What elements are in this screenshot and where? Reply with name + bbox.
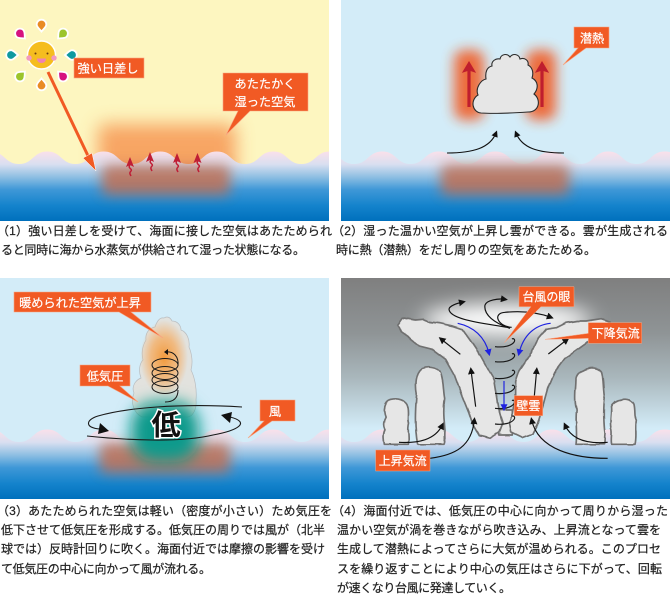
panel 3: low pressure: [0, 278, 358, 499]
label: downdraft: [545, 323, 642, 343]
caption 1: （1）強い日差しを受けて、海面に接した空気はあたためられ: [0, 223, 332, 238]
caption 3: 低下させて低気圧を形成する。低気圧の周りでは風が（北半: [1, 522, 325, 537]
label: downdraft: 下降気流: [592, 325, 640, 340]
callout: warm moist air: あたたかく: [235, 77, 295, 91]
warm sea patch: [100, 443, 230, 473]
callout: wind: [248, 400, 295, 438]
caption 1: [0, 223, 332, 257]
spiral: [152, 352, 178, 402]
low character: 低: [151, 409, 181, 442]
callout: warmed air rises: [14, 292, 163, 338]
caption 2: 時に熱（潜熱）をだし周りの空気をあたためる。: [336, 242, 596, 257]
green low-pressure area: [131, 402, 199, 462]
wind circulation: [87, 406, 242, 440]
caption 4: 生成して潜熱によってさらに大気が温められる。このプロセ: [337, 541, 661, 556]
callout: warmed air rises: 暖められた空気が上昇: [19, 295, 141, 310]
label: strong sunlight: 強い日差し: [78, 62, 138, 76]
blue downdraft arrows: [458, 323, 551, 408]
callout: latent heat: [563, 27, 609, 65]
label: strong sunlight: [74, 58, 144, 78]
wind arrowheads: [98, 412, 232, 434]
label: updraft: 上昇気流: [379, 453, 427, 468]
left wing: [398, 318, 503, 438]
arrows: water vapour: [126, 152, 202, 176]
callout: warm moist air: [223, 73, 308, 135]
caption 3: [0, 503, 332, 576]
right wing: [509, 319, 611, 438]
callout: wind: 風: [269, 404, 281, 418]
caption 4: （4）海面付近では、低気圧の中心に向かって周りから湿った: [332, 503, 668, 518]
panel 4: typhoon: [326, 278, 670, 499]
warm sea patch: [102, 165, 230, 195]
callout: low pressure: [80, 365, 138, 402]
cloud: [132, 317, 196, 417]
label: updraft: [376, 450, 430, 471]
caption 2: （2）湿った温かい空気が上昇し雲ができる。雲が生成される: [332, 223, 668, 238]
caption 4: 温かい空気が渦を巻きながら吹き込み、上昇流となって雲を: [337, 522, 661, 537]
caption 3: （3）あたためられた空気は軽い（密度が小さい）ため気圧を: [0, 503, 332, 518]
caption 3: 球では）反時計回りに吹く。海面付近では摩擦の影響を受け: [1, 541, 325, 556]
eye-wall spirals: [495, 339, 515, 424]
icon: sun: [6, 20, 77, 90]
callout: warm moist air: 湿った空気: [235, 94, 295, 109]
rising arrows: [463, 62, 548, 107]
warm glow: [140, 320, 188, 396]
caption 4: スを繰り返すことにより中心の気圧はさらに下がって、回転: [337, 561, 662, 576]
black flow arrows: [399, 299, 608, 458]
latent heat glow: [454, 50, 556, 120]
label: eye: [504, 287, 574, 343]
label: eyewall: [514, 396, 543, 416]
caption 1: ると同時に海から水蒸気が供給されて湿った状態になる。: [1, 242, 305, 257]
label: eyewall: 壁雲: [516, 399, 540, 413]
white glow: [422, 304, 592, 336]
panel 2: cloud forms: [326, 0, 670, 221]
arrow: sunlight: [48, 72, 96, 171]
callout: low pressure: 低気圧: [87, 368, 123, 384]
cloud: [473, 55, 538, 113]
caption 2: [332, 223, 668, 257]
caption 4: が速くなり台風に発達していく。: [337, 580, 511, 595]
caption 4: [332, 503, 668, 595]
panel 1: strong sunlight: [0, 0, 358, 221]
caption 3: て低気圧の中心に向かって風が流れる。: [1, 561, 211, 576]
clouds: [384, 318, 636, 444]
callout: latent heat: 潜熱: [580, 32, 604, 46]
warm moist air: [98, 124, 236, 180]
warm sea patch: [441, 165, 569, 195]
inflow arrows: [447, 133, 564, 153]
label: eye: 台風の眼: [522, 289, 570, 304]
